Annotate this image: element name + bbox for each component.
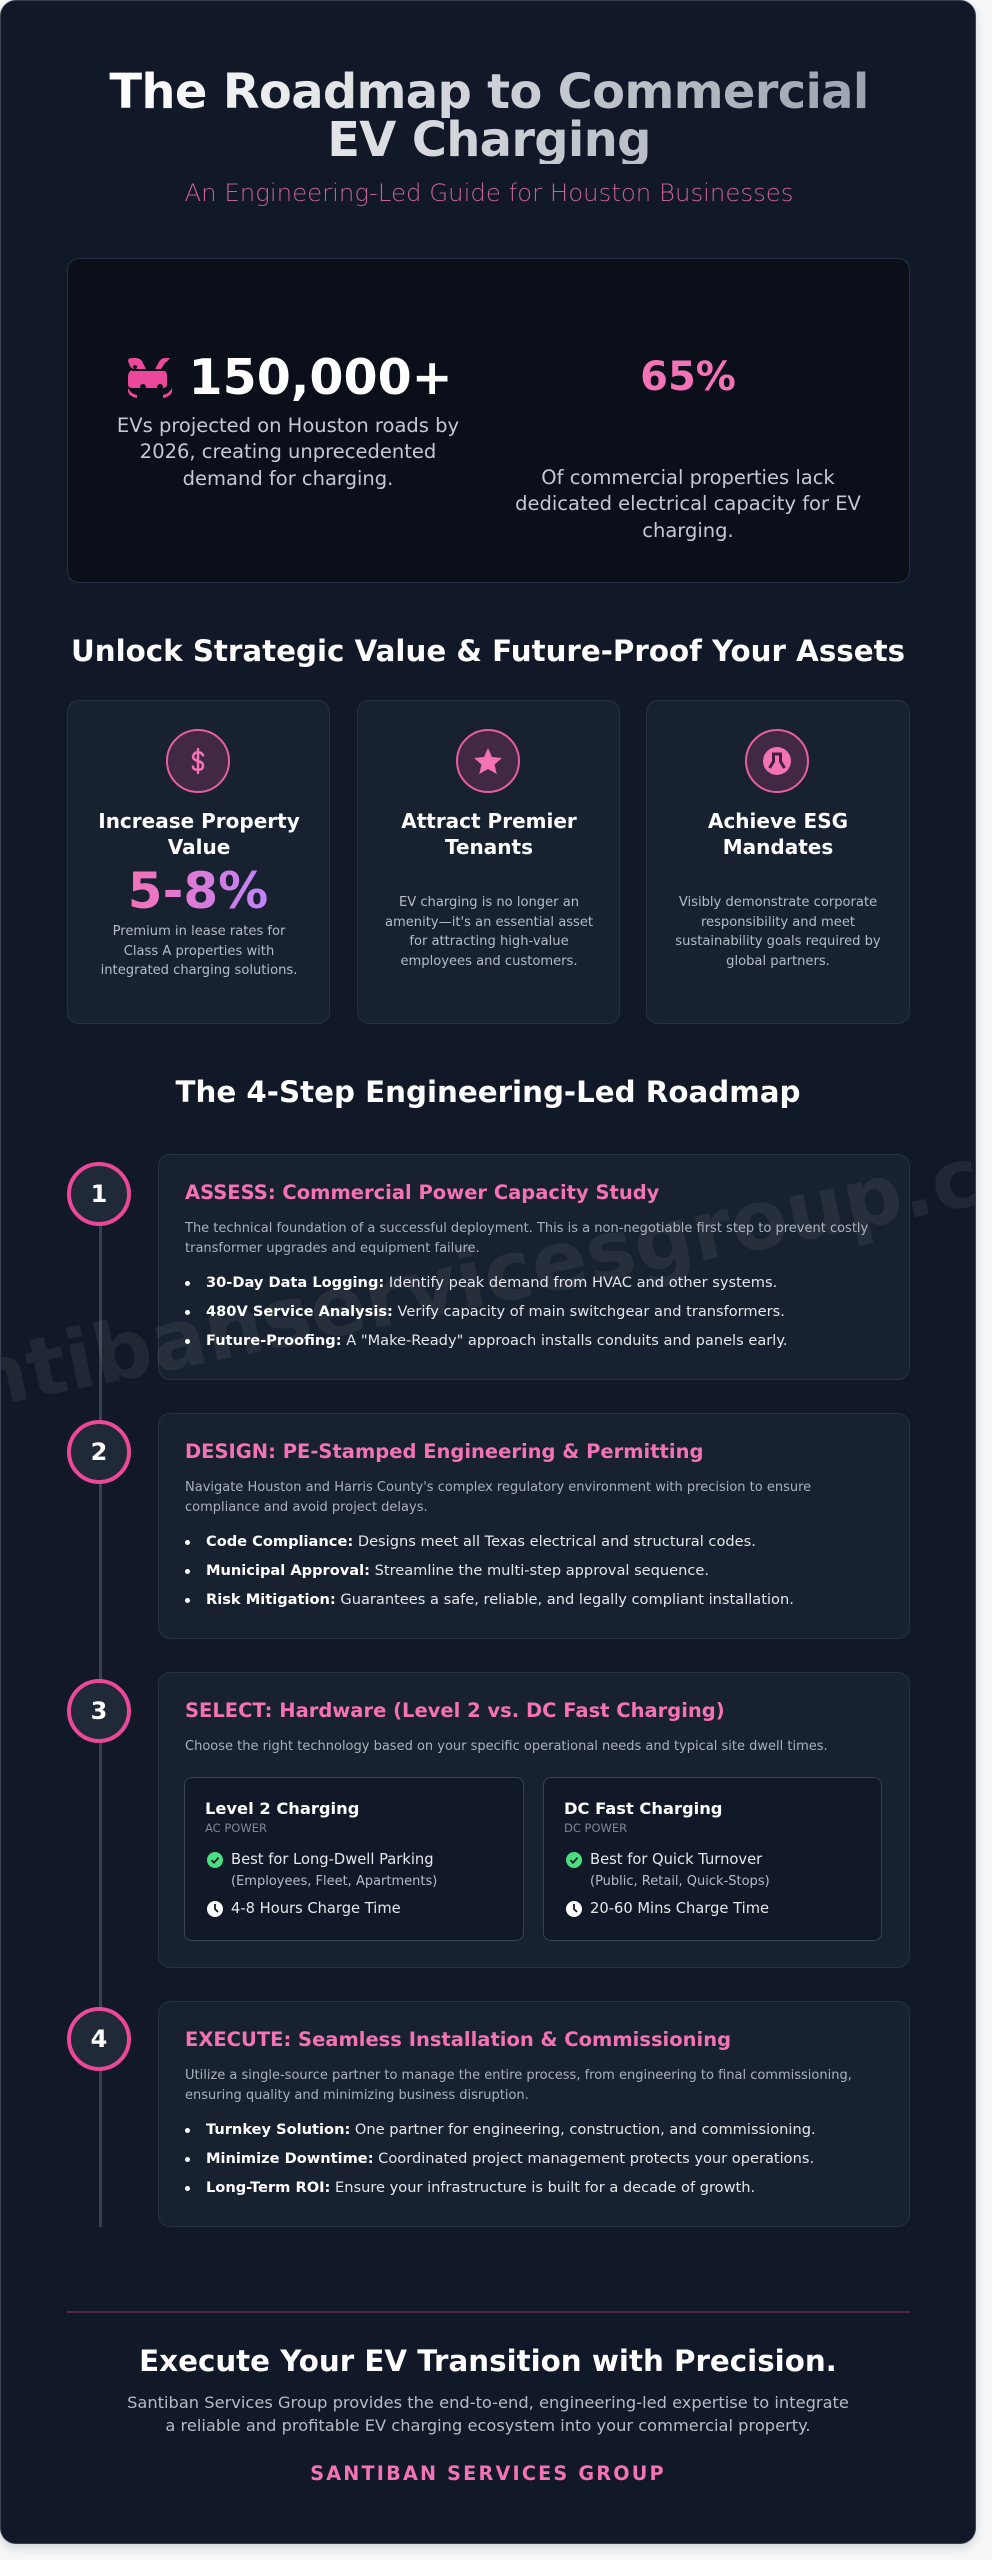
step 3 number (67, 1679, 131, 1743)
step description: transformer upgrades and equipment failure. (185, 1241, 480, 1256)
subtitle: An Engineering-Led Guide for Houston Businesses (184, 178, 794, 207)
step 1 number: 1 (91, 1180, 107, 1208)
card description: Class A properties with (124, 944, 274, 959)
step title: DESIGN: PE-Stamped Engineering & Permitting (185, 1440, 703, 1463)
stat description: properties lacking capacity: dedicated electrical capacity for EV (515, 492, 861, 515)
stat description: EVs on Houston roads: 2026, creating unprecedented (140, 440, 436, 463)
card title: Value (168, 835, 230, 859)
charger examples: (Employees, Fleet, Apartments) (231, 1874, 437, 1888)
card title: Increase Property (98, 809, 300, 833)
step 3 number: 3 (91, 1697, 107, 1725)
stat description: properties lacking capacity: charging. (642, 519, 734, 542)
step description (184, 1221, 868, 1256)
charge time: 20-60 Mins Charge Time (590, 1900, 769, 1916)
footer text: Santiban Services Group provides the end-to-end, engineering-led expertise to integrate (127, 2393, 849, 2412)
icon: check (566, 1852, 582, 1868)
card description: global partners. (726, 954, 830, 969)
bullet: 480V Service Analysis: Verify capacity of main switchgear and transformers. (206, 1303, 785, 1320)
bullet: Municipal Approval: Streamline the multi-step approval sequence. (206, 1562, 709, 1578)
card description (101, 924, 297, 978)
card description: amenity—it's an essential asset (385, 915, 593, 930)
footer text (127, 2393, 849, 2435)
step 4 number: 4 (91, 2025, 107, 2053)
panel: step 2 design (158, 1413, 910, 1639)
icon: check (207, 1852, 223, 1868)
step description: Navigate Houston and Harris County's complex regulatory environment with precision to ensure (185, 1480, 811, 1495)
card description (385, 895, 593, 969)
stat description: EVs on Houston roads: EVs projected on Houston roads by (117, 414, 459, 437)
step description (185, 1480, 811, 1515)
panel: step 4 execute (158, 2001, 910, 2227)
card description: Premium in lease rates for (113, 924, 285, 939)
bullet: Risk Mitigation: Guarantees a safe, reliable, and legally compliant installation. (206, 1590, 794, 1608)
card description: employees and customers. (400, 954, 578, 969)
card description: responsibility and meet (701, 915, 855, 930)
icon: star (456, 729, 520, 793)
step description: compliance and avoid project delays. (185, 1500, 428, 1515)
card description: EV charging is no longer an (399, 895, 579, 910)
step description (185, 2068, 852, 2103)
step title: ASSESS: Commercial Power Capacity Study (185, 1181, 659, 1204)
panel: step 1 assess (158, 1154, 910, 1380)
icon: clock (207, 1901, 223, 1917)
stat description: EVs on Houston roads: demand for charging. (183, 467, 393, 490)
footer heading: Execute Your EV Transition with Precision. (139, 2344, 837, 2378)
charger subtitle: AC POWER (205, 1821, 267, 1835)
icon: EV car charging (128, 358, 172, 398)
step 2 number (67, 1420, 131, 1484)
panel: level 2 charging (184, 1777, 524, 1941)
brand name: SANTIBAN SERVICES GROUP (310, 2462, 666, 2485)
stat description: properties lacking capacity (515, 466, 861, 542)
footer text: a reliable and profitable EV charging ecosystem into your commercial property. (165, 2416, 811, 2435)
charger subtitle: DC POWER (564, 1821, 627, 1835)
step title: SELECT: Hardware (Level 2 vs. DC Fast Charging) (185, 1699, 725, 1722)
card title: Tenants (445, 835, 533, 859)
bullet: Long-Term ROI: Ensure your infrastructure is built for a decade of growth. (206, 2178, 755, 2196)
panel: achieve ESG mandates (646, 700, 910, 1024)
bullet: Minimize Downtime: Coordinated project management protects your operations. (206, 2150, 814, 2166)
panel: DC fast charging (543, 1777, 882, 1941)
icon: clock (566, 1901, 582, 1917)
panel: step 3 select (158, 1672, 910, 1968)
step title: EXECUTE: Seamless Installation & Commissioning (185, 2028, 731, 2051)
step description: Choose the right technology based on your specific operational needs and typical site dwell times. (185, 1739, 828, 1754)
charger title: Level 2 Charging (205, 1799, 359, 1818)
step description: ensuring quality and minimizing business disruption. (185, 2088, 529, 2103)
card title: Mandates (723, 835, 833, 859)
card title (708, 809, 848, 859)
card description: integrated charging solutions. (101, 963, 297, 978)
stat: 5-8%: 5-8% (128, 862, 268, 920)
bullet: 30-Day Data Logging: Identify peak demand from HVAC and other systems. (206, 1274, 777, 1291)
bullet: Turnkey Solution: One partner for engineering, construction, and commissioning. (206, 2120, 816, 2138)
card title (98, 809, 300, 859)
title: EV Charging (327, 112, 651, 168)
charger use case: Best for Quick Turnover (590, 1851, 762, 1868)
panel: attract premier tenants (357, 700, 620, 1024)
heading: strategic value: Unlock Strategic Value & Future-Proof Your Assets (71, 634, 905, 668)
charger examples: (Public, Retail, Quick-Stops) (590, 1874, 770, 1888)
card description (675, 895, 881, 969)
stat: 65%: 65% (640, 354, 736, 400)
stat description: EVs on Houston roads (117, 414, 459, 490)
icon: recycle (745, 729, 809, 793)
card title: Attract Premier (401, 809, 577, 833)
title (109, 64, 869, 168)
charger use case: Best for Long-Dwell Parking (231, 1851, 434, 1868)
card title: Achieve ESG (708, 809, 848, 833)
heading: roadmap: The 4-Step Engineering-Led Roadmap (176, 1075, 800, 1109)
step description: The technical foundation of a successful deployment. This is a non-negotiable first step to prevent costly (185, 1221, 868, 1236)
step 1 number (67, 1162, 131, 1226)
step 2 number: 2 (91, 1438, 107, 1466)
panel: key statistics (67, 258, 910, 583)
stat description: properties lacking capacity: Of commercial properties lack (541, 466, 835, 489)
icon: dollar (166, 729, 230, 793)
title: The Roadmap to Commercial (109, 64, 869, 120)
stat: 150,000+: 150,000+ (188, 349, 453, 406)
step 4 number (67, 2007, 131, 2071)
card description: sustainability goals required by (675, 934, 881, 949)
panel: increase property value (67, 700, 330, 1024)
charger title: DC Fast Charging (564, 1799, 722, 1818)
bullet: Code Compliance: Designs meet all Texas electrical and structural codes. (206, 1532, 756, 1550)
timeline line (99, 1225, 102, 2227)
card description: Visibly demonstrate corporate (679, 895, 877, 910)
bullet: Future-Proofing: A "Make-Ready" approach installs conduits and panels early. (206, 1332, 788, 1349)
step description: Utilize a single-source partner to manage the entire process, from engineering to final commissioning, (185, 2068, 852, 2083)
card description: for attracting high-value (409, 934, 569, 949)
card title (401, 809, 577, 859)
charge time: 4-8 Hours Charge Time (231, 1900, 401, 1916)
